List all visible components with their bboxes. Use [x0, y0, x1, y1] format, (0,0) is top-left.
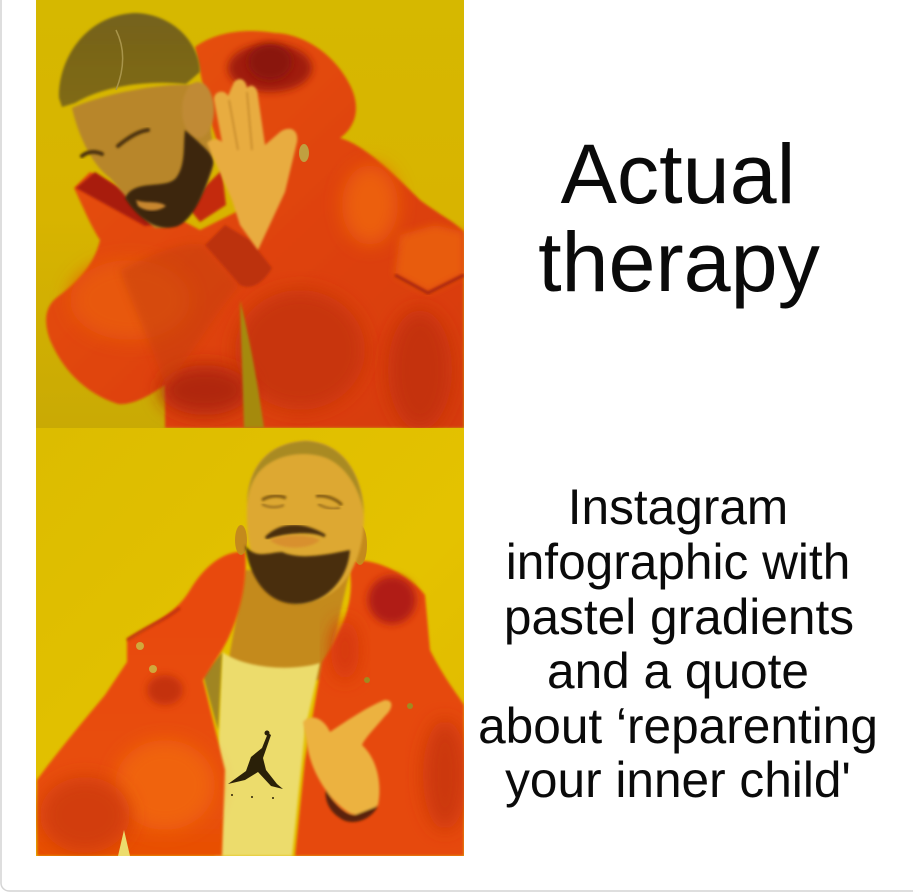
jacket: top figure	[46, 31, 464, 430]
panel: top photo, refusing gesture	[36, 0, 464, 430]
hood toggle	[299, 144, 309, 162]
head: top figure	[59, 13, 214, 228]
text: instagram infographic: your inner child'	[505, 752, 851, 808]
text: actual therapy: Actual	[561, 127, 795, 221]
text: instagram infographic: Instagram	[568, 479, 788, 535]
jacket: bottom figure	[37, 552, 467, 856]
head: bottom figure	[235, 441, 367, 604]
text: instagram infographic: pastel gradients	[504, 589, 854, 645]
text: actual therapy: therapy	[538, 215, 821, 309]
text: actual therapy	[538, 127, 821, 309]
neck and shirt: bottom figure	[203, 570, 350, 856]
panel: bottom photo, approving gesture	[36, 428, 467, 856]
text: instagram infographic: and a quote	[547, 643, 809, 699]
raised hand	[207, 79, 297, 250]
text: instagram infographic: infographic with	[506, 534, 850, 590]
pointing hand	[303, 700, 391, 822]
logo on shirt	[228, 730, 283, 799]
text: instagram infographic: about ‘reparenting	[478, 698, 878, 754]
text: instagram infographic	[478, 479, 878, 808]
